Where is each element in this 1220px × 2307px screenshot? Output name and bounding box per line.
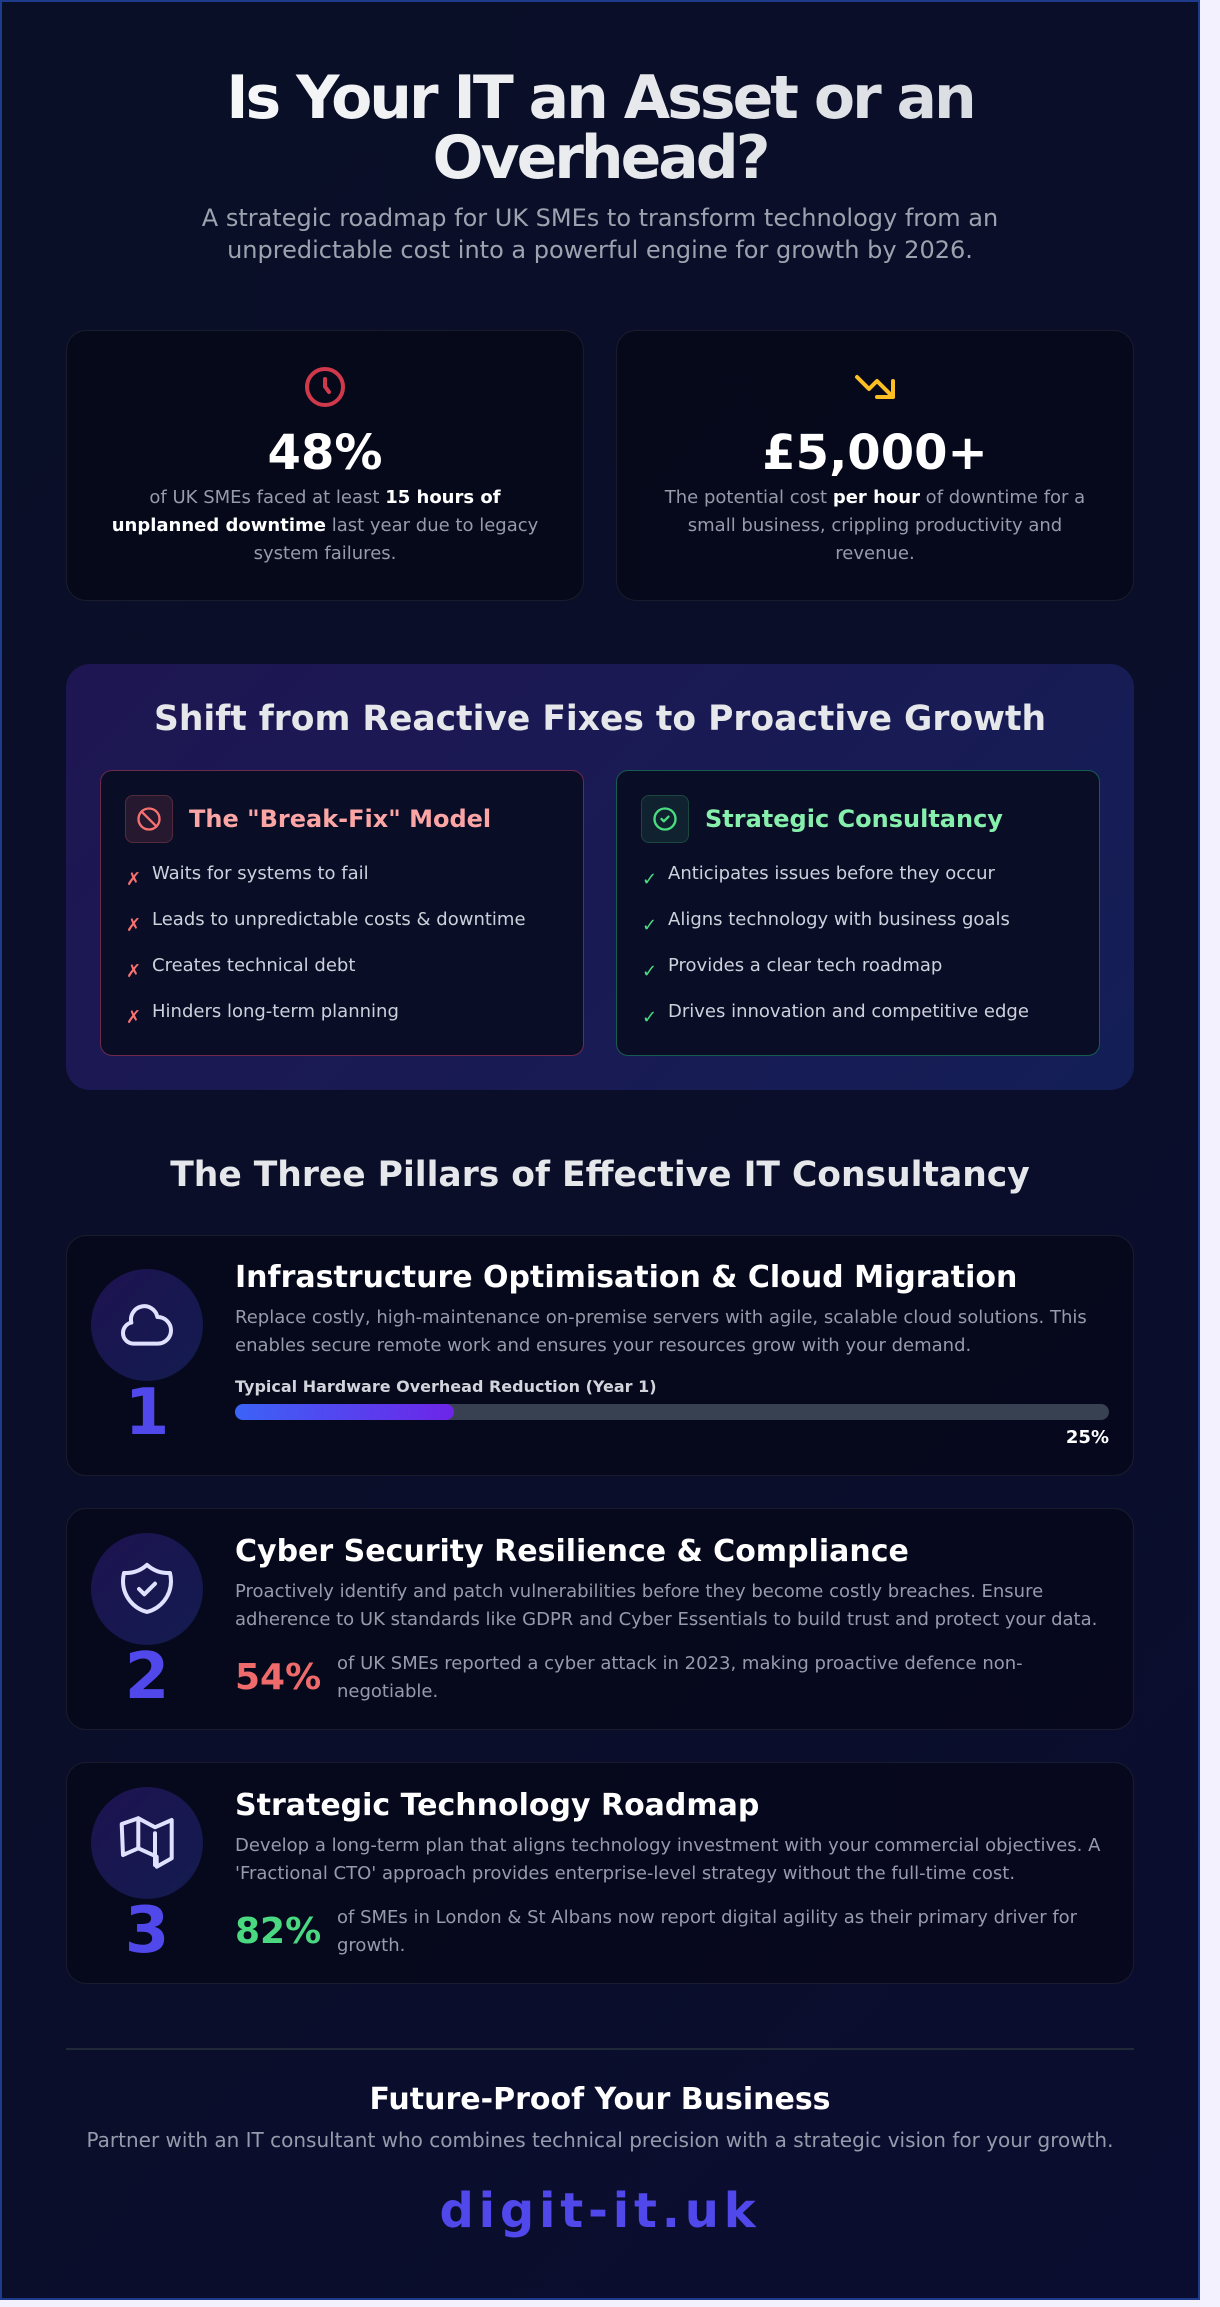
list: consultancy benefits: ✓: [642, 1007, 657, 1028]
list: break-fix drawbacks: Leads to unpredictable costs & downtime: [152, 909, 526, 930]
list: break-fix drawbacks: [126, 863, 526, 1028]
footer heading: Future-Proof Your Business: [369, 2082, 831, 2117]
icon: map: [91, 1787, 203, 1899]
pillar description: Develop a long-term plan that aligns technology investment with your commercial objectives. A: [235, 1835, 1100, 1856]
stat description: system failures.: [254, 543, 396, 564]
icon: ban: [125, 795, 173, 843]
list: consultancy benefits: Aligns technology with business goals: [668, 909, 1010, 930]
icon: trending down: [854, 374, 896, 400]
panel: strategic consultancy: [616, 770, 1100, 1056]
panel: pillar 3: [66, 1762, 1134, 1984]
list: break-fix drawbacks: Waits for systems to fail: [152, 863, 369, 884]
list: consultancy benefits: Drives innovation and competitive edge: [668, 1001, 1029, 1022]
stat text: [337, 1653, 1023, 1702]
bar chart: overhead reduction: [235, 1404, 1109, 1420]
pillar description: [235, 1581, 1097, 1630]
brand url: digit-it.uk: [439, 2183, 761, 2239]
panel: pillar 2: [66, 1508, 1134, 1730]
panel: reactive vs proactive: [66, 664, 1134, 1090]
list: break-fix drawbacks: Creates technical debt: [152, 955, 355, 976]
list: break-fix drawbacks: ✗: [126, 869, 141, 890]
icon: check circle: [641, 795, 689, 843]
stat text: negotiable.: [337, 1681, 438, 1702]
list: break-fix drawbacks: ✗: [126, 961, 141, 982]
pillar title: Infrastructure Optimisation & Cloud Migration: [235, 1260, 1017, 1295]
footer text: Partner with an IT consultant who combines technical precision with a strategic vision for your growth.: [87, 2128, 1113, 2152]
icon: cloud: [91, 1269, 203, 1381]
stat description: [664, 487, 1085, 564]
icon: clock: [305, 367, 345, 407]
title: Overhead?: [432, 123, 768, 193]
stat description: [112, 487, 538, 564]
list: consultancy benefits: ✓: [642, 915, 657, 936]
number 3: 3: [125, 1894, 169, 1968]
stat text: of SMEs in London & St Albans now report digital agility as their primary driver for: [337, 1907, 1077, 1928]
list: break-fix drawbacks: ✗: [126, 1007, 141, 1028]
stat description: small business, crippling productivity and: [688, 515, 1062, 536]
panel: break-fix model: [100, 770, 584, 1056]
pillar description: Replace costly, high-maintenance on-premise servers with agile, scalable cloud solutions. This: [235, 1307, 1087, 1328]
bar value: 25%: [1066, 1427, 1109, 1448]
list: break-fix drawbacks: Hinders long-term planning: [152, 1001, 399, 1022]
subtitle: A strategic roadmap for UK SMEs to transform technology from an: [202, 204, 998, 232]
number 1: 1: [125, 1376, 169, 1450]
panel: pillar 1: [66, 1235, 1134, 1476]
stat text: growth.: [337, 1935, 405, 1956]
pillar description: 'Fractional CTO' approach provides enterprise-level strategy without the full-time cost.: [235, 1863, 1015, 1884]
stat text: of UK SMEs reported a cyber attack in 2023, making proactive defence non-: [337, 1653, 1023, 1674]
list: consultancy benefits: [642, 863, 1029, 1028]
pillar description: [235, 1307, 1087, 1356]
panel: cost stat: [616, 330, 1134, 601]
heading: shift: Shift from Reactive Fixes to Proactive Growth: [154, 699, 1046, 739]
stat description: unplanned downtime last year due to legacy: [112, 515, 538, 536]
stat: 82%: 82%: [235, 1911, 321, 1952]
pillar description: adherence to UK standards like GDPR and Cyber Essentials to build trust and protect your data.: [235, 1609, 1097, 1630]
title: [2, 68, 1198, 188]
list: consultancy benefits: Provides a clear tech roadmap: [668, 955, 942, 976]
pillar description: Proactively identify and patch vulnerabilities before they become costly breaches. Ensure: [235, 1581, 1043, 1602]
icon: shield: [91, 1533, 203, 1645]
stat: £5,000+: £5,000+: [762, 425, 988, 481]
heading: three pillars: The Three Pillars of Effective IT Consultancy: [170, 1155, 1030, 1195]
pillar description: [235, 1835, 1100, 1884]
stat description: The potential cost per hour of downtime for a: [665, 487, 1085, 508]
panel: downtime stat: [66, 330, 584, 601]
list: consultancy benefits: ✓: [642, 869, 657, 890]
pillar title: Cyber Security Resilience & Compliance: [235, 1534, 909, 1569]
stat text: [337, 1907, 1077, 1956]
list: break-fix drawbacks: ✗: [126, 915, 141, 936]
subtitle: [202, 204, 998, 264]
bar label: Typical Hardware Overhead Reduction (Year 1): [235, 1377, 657, 1396]
heading: break-fix: The "Break-Fix" Model: [189, 805, 491, 833]
bar fill: [235, 1404, 454, 1420]
number 2: 2: [125, 1640, 169, 1714]
subtitle: unpredictable cost into a powerful engine for growth by 2026.: [227, 236, 973, 264]
pillar description: enables secure remote work and ensures your resources grow with your demand.: [235, 1335, 971, 1356]
pillar title: Strategic Technology Roadmap: [235, 1788, 759, 1823]
list: consultancy benefits: ✓: [642, 961, 657, 982]
stat: 54%: 54%: [235, 1657, 321, 1698]
list: consultancy benefits: Anticipates issues before they occur: [668, 863, 995, 884]
stat description: revenue.: [835, 543, 915, 564]
title: Is Your IT an Asset or an: [226, 63, 974, 133]
stat: 48%: 48%: [268, 425, 382, 481]
stat description: of UK SMEs faced at least 15 hours of: [149, 487, 501, 508]
heading: consultancy: Strategic Consultancy: [705, 805, 1003, 833]
